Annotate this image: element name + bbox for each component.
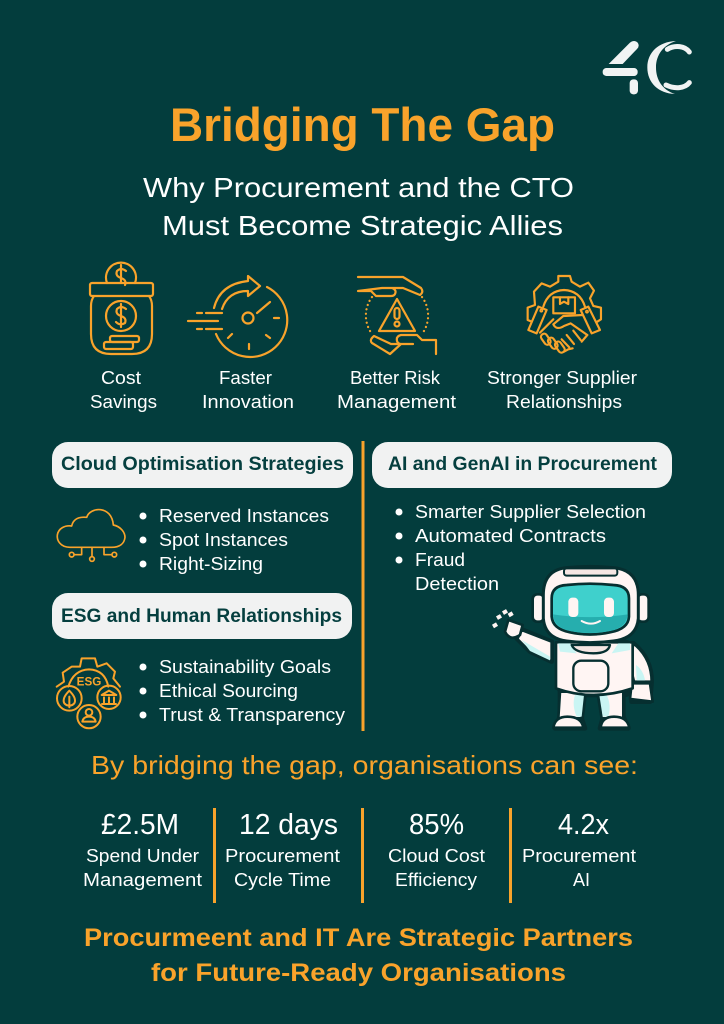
bullet list: Smarter Supplier Selection (415, 501, 646, 522)
subtitle: Why Procurement and the CTO (143, 172, 574, 203)
closing statement: for Future-Ready Organisations (151, 959, 566, 987)
bullet list: Ethical Sourcing (159, 680, 298, 701)
label: Savings (90, 391, 157, 412)
bullet list (396, 501, 646, 594)
stat: procurement AI: 4.2x (558, 809, 609, 841)
icon: ESG gear: ESG (77, 675, 101, 688)
label (90, 367, 157, 412)
title: Bridging The Gap (170, 98, 555, 151)
bullet list: Right-Sizing (159, 553, 263, 574)
raised arm (517, 630, 552, 662)
benefit: cost savings (90, 263, 157, 412)
section heading: By bridging the gap, organisations can see: (91, 750, 638, 780)
stat: spend under management: Spend Under (86, 845, 199, 866)
subtitle (143, 172, 574, 241)
bullet list: Detection (415, 573, 499, 594)
heading pill: AI and GenAI in Procurement (388, 454, 658, 475)
label: Better Risk (350, 367, 441, 388)
label: Stronger Supplier (487, 367, 637, 388)
icon: cloud network (57, 510, 125, 561)
icon: hands holding warning triangle (358, 277, 436, 354)
label: Relationships (506, 391, 622, 412)
stat: procurement cycle time (225, 809, 340, 890)
feet (553, 717, 583, 728)
closing statement: Procurmeent and IT Are Strategic Partners (84, 924, 633, 952)
bullet list: Trust & Transparency (159, 704, 346, 725)
bullet list: Fraud (415, 549, 465, 570)
helmet (543, 566, 638, 643)
closing statement (84, 924, 633, 987)
right hand (630, 683, 653, 702)
label: Management (337, 391, 456, 412)
ear pieces (533, 594, 544, 622)
right arm (630, 643, 652, 682)
benefit: stronger supplier relationships (487, 276, 637, 412)
heading pill (52, 442, 353, 488)
benefit: better risk management (337, 277, 456, 412)
label (202, 367, 294, 412)
eyes (568, 598, 578, 617)
heading pill (52, 593, 352, 639)
stat: procurement cycle time: 12 days (239, 809, 338, 841)
torso (556, 642, 633, 695)
label (487, 367, 637, 412)
label: Faster (219, 367, 272, 388)
panel: ESG and human relationships (52, 593, 352, 728)
stat: cloud cost efficiency (388, 809, 485, 890)
raised hand (492, 609, 523, 638)
stat: procurement AI: AI (573, 869, 590, 890)
heading pill (372, 442, 672, 488)
stat: cloud cost efficiency: Efficiency (395, 869, 478, 890)
bullet list: Spot Instances (159, 529, 288, 550)
chest panel (573, 661, 608, 691)
icon: ESG gear (57, 658, 121, 728)
icon: stopwatch with arrow (188, 276, 287, 357)
label (337, 367, 456, 412)
panel: AI and GenAI in procurement (372, 442, 672, 728)
icon: money jar (90, 263, 153, 354)
stat: cloud cost efficiency: 85% (409, 809, 464, 841)
visor (552, 584, 629, 634)
stat: procurement AI: Procurement (522, 845, 636, 866)
illustration: waving robot astronaut (492, 566, 653, 728)
label: Cost (101, 367, 141, 388)
legs (558, 692, 585, 718)
stat: cloud cost efficiency: Cloud Cost (388, 845, 485, 866)
subtitle: Must Become Strategic Allies (162, 210, 563, 241)
icon: gear with handshake (528, 276, 601, 354)
stat: procurement cycle time: Cycle Time (234, 869, 331, 890)
panel: cloud optimisation strategies (52, 442, 353, 574)
heading pill: Cloud Optimisation Strategies (61, 454, 344, 475)
bullet list: Automated Contracts (415, 525, 606, 546)
collar (572, 645, 610, 653)
bullet list: Reserved Instances (159, 505, 329, 526)
stat: spend under management: Management (83, 869, 202, 890)
logo: 4C (603, 41, 689, 94)
stat: procurement cycle time: Procurement (225, 845, 340, 866)
outline backing (517, 630, 652, 728)
heading pill: ESG and Human Relationships (61, 606, 342, 627)
label: Innovation (202, 391, 294, 412)
stat: spend under management (83, 809, 202, 890)
stat: procurement AI (522, 809, 636, 890)
smile (582, 621, 600, 624)
stat: spend under management: £2.5M (101, 809, 179, 841)
bullet list: Sustainability Goals (159, 656, 331, 677)
bullet list (140, 505, 329, 574)
bullet list (140, 656, 346, 725)
benefit: faster innovation (188, 276, 294, 412)
